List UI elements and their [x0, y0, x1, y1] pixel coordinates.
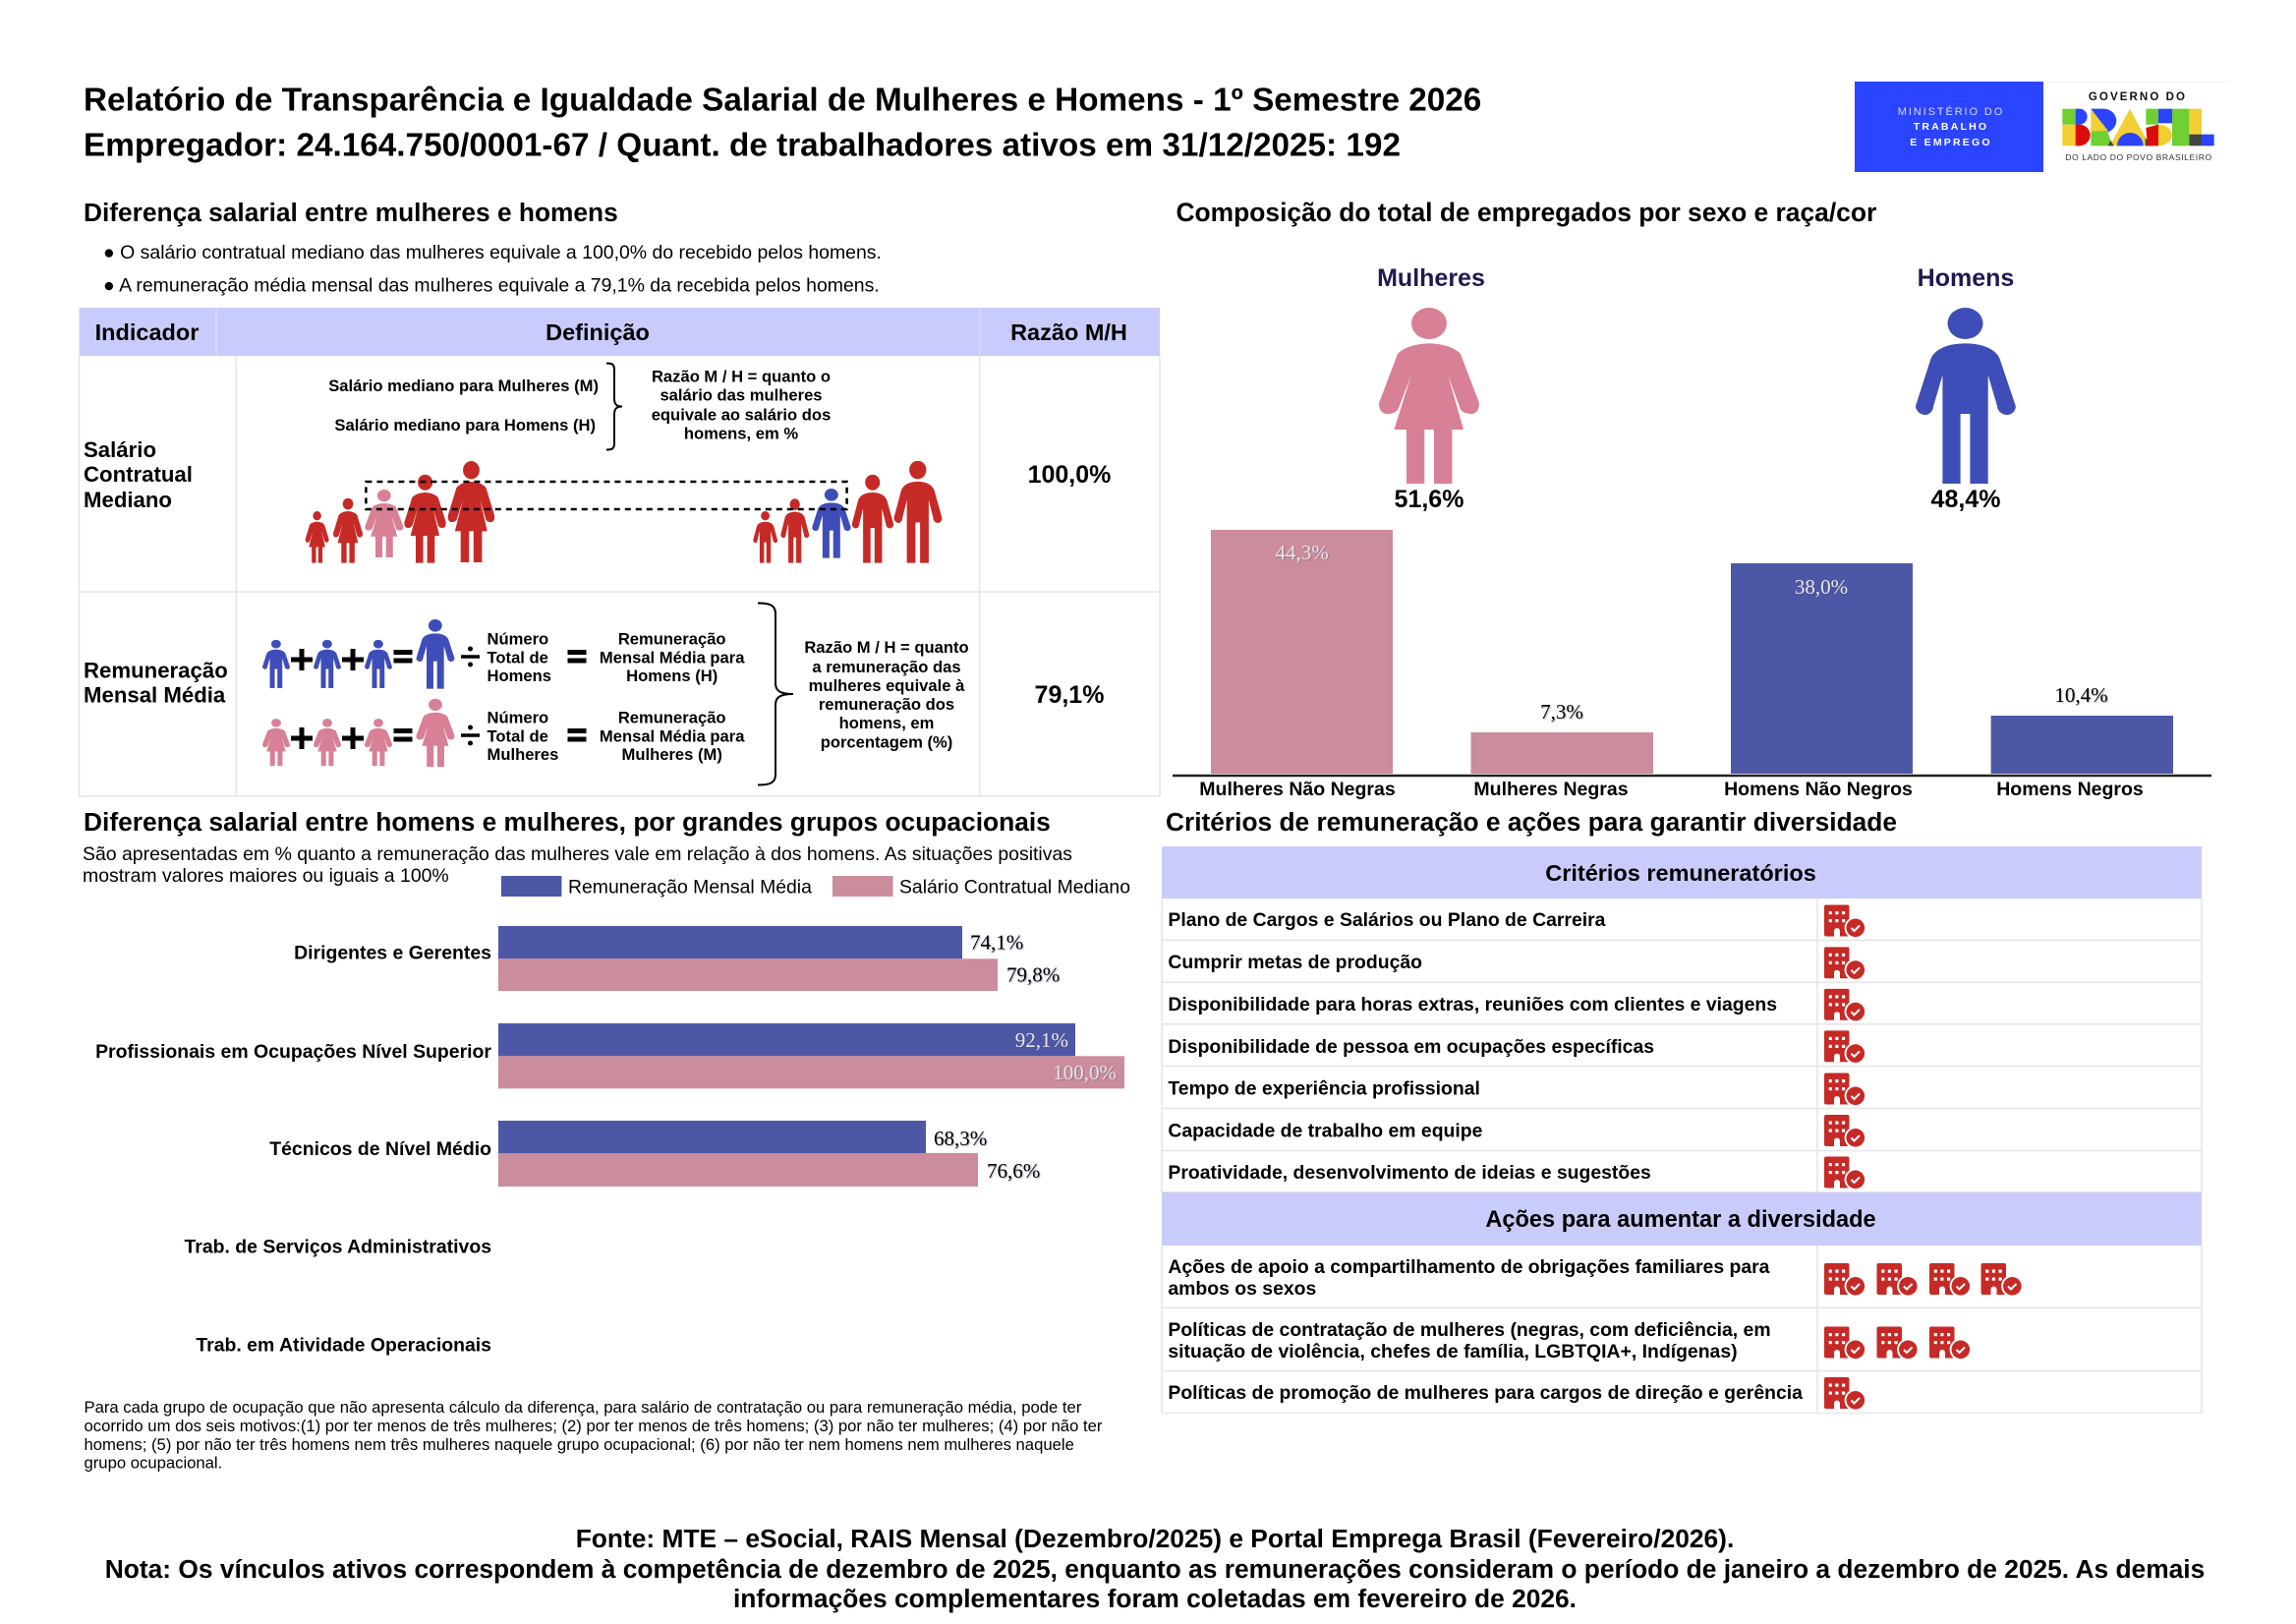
text: razão median: homens, em % [684, 425, 798, 442]
actions grid [1162, 1246, 2202, 1414]
panel: indicator table [79, 308, 1160, 796]
criterion rows: Cumprir metas de produção [1168, 952, 1422, 973]
text block: bullets: ● O salário contratual mediano das mulheres equivale a 100,0% do recebido pelos homens. [103, 242, 882, 263]
table header [79, 308, 1160, 356]
footnote [85, 1398, 1103, 1473]
row label: salário contratual mediano: Mediano [84, 488, 172, 512]
criterion rows: Disponibilidade de pessoa em ocupações específicas [1168, 1036, 1654, 1058]
icon group: women in line [306, 461, 494, 563]
footnote: grupo ocupacional. [85, 1453, 222, 1473]
group: técnicos: 76,6% [987, 1159, 1040, 1183]
logo: ministry and government: DO LADO DO POVO BRASILEIRO [2065, 152, 2212, 162]
footer: source and note [105, 1524, 2205, 1613]
text: razão median [652, 368, 831, 442]
formula: men [262, 619, 745, 689]
criterion rows: Capacidade de trabalho em equipe [1168, 1121, 1483, 1142]
group: técnicos [269, 1121, 1040, 1187]
bar: mulheres negras: Mulheres Negras [1473, 779, 1629, 800]
text: razão average: homens, em [839, 714, 934, 732]
brace: average [758, 604, 793, 784]
men summary: 48,4% [1931, 486, 2000, 513]
formula: women: Remuneração [618, 708, 726, 727]
action rows: Ações de apoio a compartilhamento de obrigações familiares para [1168, 1256, 1770, 1278]
dashed box: median position [366, 482, 847, 509]
title: Relatório de Transparência e Igualdade Salarial de Mulheres e Homens - 1º Semestre 2026 [84, 83, 1481, 118]
row label: remuneração mensal média: Mensal Média [84, 682, 226, 708]
section header: critérios: Critérios remuneratórios [1545, 860, 1816, 886]
criteria grid [1162, 899, 2202, 1192]
text: razão average: remuneração dos [819, 695, 954, 714]
criterion rows: Plano de Cargos e Salários ou Plano de Carreira [1168, 909, 1606, 931]
median definition labels: Salário mediano para Homens (H) [334, 416, 596, 435]
text block: chart note: mostram valores maiores ou iguais a 100% [83, 865, 449, 887]
group: dirigentes e gerentes: Dirigentes e Gerentes [294, 942, 491, 963]
legend: Salário Contratual Mediano [899, 877, 1130, 899]
text block: chart note: São apresentadas em % quanto a remuneração das mulheres vale em relação à dos homens. As situações positivas [83, 843, 1072, 865]
text: razão average: Razão M / H = quanto [804, 638, 969, 657]
footnote: homens; (5) por não ter três homens nem três mulheres naquele grupo ocupacional; (6) por não ter nem homens nem mulheres naquele [85, 1435, 1074, 1454]
text: razão average: a remuneração das [812, 658, 961, 676]
formula: men: Mensal Média para [600, 649, 745, 667]
bar: mulheres não negras: Mulheres Não Negras [1199, 779, 1396, 800]
bar: homens negros: Homens Negros [1996, 779, 2144, 800]
bar chart: occupational groups [95, 926, 1124, 1357]
legend [501, 876, 1130, 899]
text: razão average [804, 638, 969, 751]
logo: ministry and government: E EMPREGO [1910, 137, 1992, 148]
action rows: ambos os sexos [1168, 1278, 1316, 1300]
bar: homens negros: 10,4% [2054, 683, 2108, 707]
bar: homens não negros: Homens Não Negros [1724, 779, 1913, 800]
table grid [79, 356, 1160, 796]
row label: remuneração mensal média: Remuneração [84, 659, 228, 682]
text block: bullets [103, 242, 882, 297]
formula: women: Mulheres (M) [622, 745, 722, 764]
women summary: Mulheres [1377, 264, 1485, 292]
brace: median [606, 364, 622, 450]
panel: criteria table [1162, 846, 2202, 1414]
logo: ministry and government: GOVERNO DO [2089, 91, 2187, 103]
group: profissionais: Profissionais em Ocupações Nível Superior [95, 1041, 491, 1063]
heading: critérios e ações: Critérios de remuneração e ações para garantir diversidade [1166, 807, 1897, 837]
logo: ministry and government: MINISTÉRIO DO [1898, 105, 2004, 118]
formula: men: Homens (H) [626, 667, 718, 685]
footnote: Para cada grupo de ocupação que não apresenta cálculo da diferença, para salário de contratação ou para remuneração média, pode ter [85, 1398, 1082, 1417]
heading: diferença por grupos: Diferença salarial entre homens e mulheres, por grandes grupos ocupacionais [84, 807, 1051, 837]
legend: Remuneração Mensal Média [568, 877, 812, 899]
men summary [1916, 264, 2016, 513]
text: razão median: salário das mulheres [660, 385, 823, 405]
bar: mulheres negras: 7,3% [1540, 700, 1583, 724]
row label: salário contratual mediano [84, 437, 193, 512]
text: razão median: Razão M / H = quanto o [652, 368, 831, 385]
criterion rows [1168, 904, 1866, 1190]
bar: mulheres não negras [1199, 530, 1396, 800]
formula: men: Número [488, 629, 548, 649]
footer: source and note: Fonte: MTE – eSocial, RAIS Mensal (Dezembro/2025) e Portal Emprega Brasil (Fevereiro/2026). [576, 1524, 1734, 1553]
action rows: Políticas de promoção de mulheres para cargos de direção e gerência [1168, 1382, 1803, 1404]
table header: Definição [545, 319, 650, 345]
bar: homens não negros: 38,0% [1795, 575, 1848, 599]
group: técnicos: 68,3% [934, 1127, 987, 1150]
formula: women [262, 699, 745, 767]
criterion rows: Tempo de experiência profissional [1168, 1077, 1480, 1099]
text: razão average: mulheres equivale à [809, 676, 965, 695]
group: profissionais: 92,1% [1015, 1028, 1068, 1052]
formula: men: Remuneração [618, 629, 726, 649]
median definition labels: Salário mediano para Mulheres (M) [328, 377, 599, 395]
group: dirigentes e gerentes: 79,8% [1006, 963, 1060, 987]
heading: composição: Composição do total de empregados por sexo e raça/cor [1176, 198, 1876, 227]
bar: mulheres negras [1470, 700, 1653, 800]
formula: women: Total de [488, 727, 548, 745]
logo: ministry and government: TRABALHO [1914, 121, 1988, 133]
value: 100,0%: 100,0% [1028, 461, 1111, 489]
group: técnicos: Técnicos de Nível Médio [269, 1138, 491, 1160]
section header: ações: Ações para aumentar a diversidade [1485, 1207, 1876, 1233]
action rows: Políticas de contratação de mulheres (negras, com deficiência, em [1168, 1319, 1771, 1341]
footer: source and note: Nota: Os vínculos ativos correspondem à competência de dezembro de 2025, enquanto as remunerações consideram o período de janeiro a dezembro de 2025. As demais [105, 1554, 2205, 1584]
row label: salário contratual mediano: Contratual [84, 462, 193, 487]
criterion rows: Proatividade, desenvolvimento de ideias e sugestões [1168, 1162, 1651, 1184]
action rows: situação de violência, chefes de família, LGBTQIA+, Indígenas) [1168, 1341, 1738, 1363]
formula: men: Total de [488, 649, 548, 667]
text block: chart note [83, 843, 1072, 887]
formula: women: Número [488, 708, 548, 727]
criterion rows: Disponibilidade para horas extras, reuniões com clientes e viagens [1168, 994, 1777, 1015]
title: Empregador: 24.164.750/0001-67 / Quant. de trabalhadores ativos em 31/12/2025: 192 [84, 128, 1401, 163]
logo: ministry and government [1855, 82, 2229, 172]
median definition labels [328, 377, 599, 435]
section header: ações [1162, 1192, 2202, 1246]
bar: homens não negros [1724, 563, 1913, 800]
text: razão average: porcentagem (%) [821, 733, 952, 751]
table header: Indicador [95, 319, 199, 345]
formula: men: Homens [488, 667, 551, 685]
row label: remuneração mensal média [84, 659, 228, 708]
footnote: ocorrido um dos seis motivos:(1) por ter menos de três mulheres; (2) por ter menos de três homens; (3) por não ter mulheres; (4) por não ter [85, 1417, 1103, 1435]
women summary [1377, 264, 1485, 513]
footer: source and note: informações complementares foram coletadas em fevereiro de 2026. [733, 1584, 1577, 1613]
text: razão median: equivale ao salário dos [652, 405, 831, 425]
action rows [1168, 1256, 2023, 1412]
bar: mulheres não negras: 44,3% [1275, 541, 1329, 564]
women summary: 51,6% [1395, 486, 1464, 513]
row label: salário contratual mediano: Salário [84, 437, 156, 462]
bar chart: composition by race [1173, 530, 2211, 800]
section header: critérios [1162, 846, 2202, 899]
group: profissionais [95, 1023, 1124, 1088]
bar: homens negros [1991, 683, 2173, 800]
formula: women: Mulheres [488, 745, 558, 764]
group: profissionais: 100,0% [1053, 1061, 1117, 1084]
value: 79,1%: 79,1% [1035, 681, 1104, 709]
men summary: Homens [1918, 264, 2014, 292]
title [84, 83, 1481, 163]
group: serviços administrativos: Trab. de Serviços Administrativos [184, 1237, 491, 1258]
axis [1173, 775, 2211, 777]
group: atividade operacional: Trab. em Atividade Operacionais [196, 1335, 491, 1357]
formula: women: Mensal Média para [600, 727, 745, 745]
heading: diferença salarial: Diferença salarial entre mulheres e homens [84, 198, 618, 227]
text block: bullets: ● A remuneração média mensal das mulheres equivale a 79,1% da recebida pelos homens. [103, 275, 880, 297]
panel: composition by sex [1377, 264, 2016, 513]
icon group: men in line [753, 461, 942, 563]
group: dirigentes e gerentes: 74,1% [970, 930, 1023, 954]
table header: Razão M/H [1010, 319, 1127, 345]
group: dirigentes e gerentes [294, 926, 1060, 991]
